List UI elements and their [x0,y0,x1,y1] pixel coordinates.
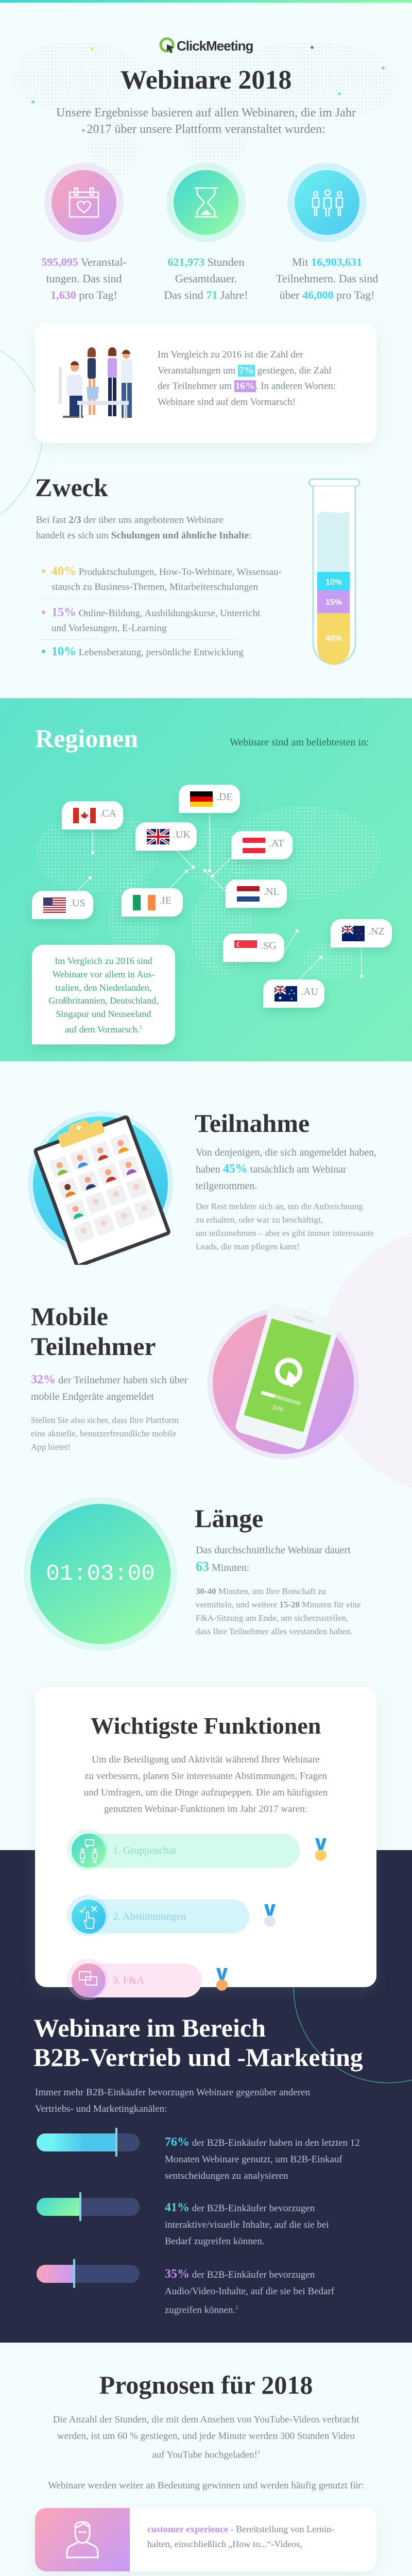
heading: Regionen: Regionen [35,724,138,753]
Prognosen lead: Webinare werden weiter an Bedeutung gewinnen und werden häufig genutzt für: [48,2480,364,2491]
B2B intro: Immer mehr B2B-Einkäufer bevorzugen Webinare gegenüber anderen [35,2087,310,2098]
illustration: clipboard [28,1111,173,1265]
top gradient bar [0,0,412,3]
mobile text: mobile Endgeräte angemeldet [31,1391,154,1402]
test tube chart: 15% [325,598,342,607]
logo: ClickMeeting [177,38,253,54]
navy background B2B [0,1850,412,2343]
stats text: hours: Gesamtdauer. [175,272,237,285]
regions callout: Großbritannien, Deutschland, [48,995,159,1006]
card: customer experience: customer experience - Bereitstellung von Lernin- [147,2524,334,2534]
regions callout: tralien, den Niederlanden, [56,982,151,993]
flag: CA: .CA [99,808,116,819]
B2B intro: Vertriebs- und Marketingkanälen: [35,2104,167,2114]
Teilnahme text: Von denjenigen, die sich angemeldet haben, [196,1147,376,1158]
flag: AT: .AT [269,838,284,849]
card: customer experience [35,2508,376,2571]
Teilnahme note: Der Rest meldete sich an, um die Aufzeichnung [196,1201,363,1211]
regions intro: Webinare sind am beliebtesten in: [230,737,369,748]
test tube chart: 40% [325,634,342,643]
B2B text 76%: sentscheidungen zu analysieren [165,2171,288,2181]
decorative arc [294,1987,412,2083]
Länge note: F&A-Sitzung am Ende, um sicherzustellen, [196,1613,348,1623]
stat circle: events [44,163,124,242]
item 15%: 15% Online-Bildung, Ausbildungskurse, Unterricht [52,606,260,619]
B2B text 35%: Audio/Video-Inhalte, auf die sie bei Bedarf [165,2286,334,2297]
B2B text 41%: interaktive/visuelle Inhalte, auf die sie bei [165,2219,329,2230]
heading: Mobile Teilnehmer: Teilnehmer [31,1332,156,1361]
test tube chart: 10% [325,578,342,587]
heading: Mobile Teilnehmer [31,1302,156,1361]
regions callout: Webinare vor allem in Aus- [53,969,154,979]
growth text: Im Vergleich zu 2016 ist die Zahl der [158,349,303,360]
title: Webinare 2018 [121,65,291,95]
item 15% [42,606,261,634]
mobile text: 32% der Teilnehmer haben sich über [31,1373,187,1386]
illustration: clock: 01:03:00 [46,1561,155,1587]
flag: NZ: .NZ [368,926,385,937]
section: Regionen [0,698,412,1061]
flag: DE [179,785,240,813]
item 40%: 40% Produktschulungen, How-To-Webinare, Wissensau- [52,565,282,578]
growth text [158,349,336,407]
Länge note: dass Ihre Teilnehmer alles verstanden haben. [196,1626,352,1636]
mobile note: App bietet! [31,1442,71,1452]
flag: IE [122,888,183,917]
Teilnahme text [196,1147,376,1192]
Länge note [196,1586,361,1636]
B2B text 76%: Monaten Webinare genutzt, um B2B-Einkauf [165,2154,342,2165]
stats text: events: 1,630 pro Tag! [50,289,117,301]
item 10%: 10% Lebensberatung, persönliche Entwicklung [52,645,244,658]
mobile note: eine aktuelle, benutzerfreundliche mobile [31,1429,176,1438]
item 15%: und Vorlesungen, E-Learning [52,623,167,634]
illustration: team [59,347,132,419]
flag: AT [231,831,293,859]
regions callout: auf dem Vormarsch.1 [65,1024,142,1035]
Zweck intro: handelt es sich um Schulungen und ähnliche Inhalte: [36,530,252,541]
B2B intro [35,2087,310,2114]
heading: Länge: Länge [195,1504,263,1533]
intro: genutzten Webinar-Funktionen im Jahr 2017 waren: [104,1804,307,1815]
stats text: participants: Mit 16,903,631 [292,256,362,268]
intro: Um die Beteiligung und Aktivität während Ihrer Webinare [92,1754,320,1765]
Teilnahme note [196,1201,374,1251]
Länge text [196,1545,351,1574]
flag: NL: .NL [263,886,280,897]
flag: US: .US [70,897,85,909]
item 40%: stausch zu Business-Themen, Mitarbeiterschulungen [52,582,258,592]
regions callout: Singapur und Neuseeland [56,1009,151,1019]
flag: NL [226,879,287,908]
illustration: clock [24,1497,177,1651]
B2B text 35%: zugreifen können.2 [165,2304,238,2315]
stats text: participants: Teilnehmern. Das sind [276,272,378,285]
heading: Zweck: Zweck [35,473,108,502]
panel: Wichtigste Funktionen [35,1687,376,1987]
illustration: phone: 32% [271,1404,284,1413]
flag: UK: .UK [173,829,191,840]
intro: zu verbessern, planen Sie interessante Abstimmungen, Fragen [84,1771,327,1782]
Prognosen intro: Die Anzahl der Stunden, die mit dem Ansehen von YouTube-Videos verbracht [53,2414,359,2425]
flag: IE: .IE [159,895,171,906]
world map dots [37,807,381,979]
B2B text 41%: Bedarf zugreifen können. [165,2236,265,2247]
intro text [56,106,356,136]
mobile note: Stellen Sie also sicher, dass Ihre Plattform [31,1415,179,1425]
flag: AU: .AU [301,986,318,997]
card: customer experience: halten, einschließlich „How to...“-Videos, [147,2539,302,2549]
Zweck list [38,565,282,658]
flag: US [32,891,93,919]
stat circle: hours [166,163,246,242]
B2B bar 35% [37,2259,140,2288]
stats text: hours [164,256,248,301]
regions callout [32,945,175,1044]
stats text: hours: Das sind 71 Jahre! [164,289,248,301]
B2B text 35% [165,2267,335,2315]
growth card [35,323,376,443]
mobile note [31,1415,179,1452]
Länge text: Das durchschnittliche Webinar dauert [196,1545,351,1556]
item 40% [42,565,282,592]
Teilnahme note: Leads, die man pflegen kann! [196,1242,300,1251]
B2B text 35%: 35% der B2B-Einkäufer bevorzugen [165,2267,315,2281]
heading: Teilnahme: Teilnahme [195,1109,310,1138]
Länge note: 30-40 Minuten, um Ihre Botschaft zu [196,1586,326,1596]
stats text: events: tungen. Das sind [46,272,122,285]
flag: NZ [331,919,392,947]
stats text: participants [276,256,378,301]
bar: Abstimmungen [67,1895,276,1936]
intro text: Unsere Ergebnisse basieren auf allen Webinaren, die im Jahr [56,106,356,120]
Teilnahme note: zu erhalten, oder war zu beschäftigt, [196,1215,323,1225]
stats text: participants: über 46,000 pro Tag! [279,289,375,301]
B2B bar 41% [37,2192,140,2221]
flag: UK [135,822,197,851]
heading: B2B: B2B-Vertrieb und -Marketing [33,2043,363,2072]
B2B text 41%: 41% der B2B-Einkäufer bevorzugen [165,2201,315,2214]
intro: und Umfragen, um die Dinge aufzupeppen. Die am häufigsten [84,1787,328,1798]
stat circle: participants [287,163,367,242]
intro [83,1754,328,1815]
stats text: events [41,256,127,301]
B2B text 76% [165,2136,360,2181]
bar: Gruppenchat: 1. Gruppenchat [113,1845,176,1856]
growth text: der Teilnehmer um 16%. In anderen Worten: [158,381,336,392]
Zweck intro: Bei fast 2/3 der über uns angebotenen Webinare [36,515,224,526]
growth text: Webinare sind auf dem Vormarsch! [158,397,296,407]
B2B text 41% [165,2201,329,2247]
test tube chart [308,478,360,665]
decorative arc [0,350,42,515]
flag: SG: .SG [261,940,277,952]
bar: F&A [67,1959,228,2000]
bar: Abstimmungen: 2. Abstimmungen [113,1911,186,1922]
heading: Mobile Teilnehmer: Mobile [31,1302,108,1331]
stats text: hours: 621,973 Stunden [167,256,245,268]
background world map dots [11,43,396,174]
heading: Wichtigste Funktionen [91,1713,321,1739]
Länge text: 63 Minuten: [196,1559,249,1574]
background faint circle [319,1226,412,1494]
Teilnahme note: um teilzunehmen – aber es gibt immer interessante [196,1228,374,1238]
bar: Gruppenchat [67,1829,327,1870]
bar: F&A: 3. F&A [113,1975,144,1986]
heading: B2B: Webinare im Bereich [33,2013,266,2042]
illustration: phone [208,1308,359,1459]
mobile text [31,1373,187,1402]
growth text: Veranstaltungen um 7% gestiegen, die Zahl [158,365,331,376]
B2B text 76%: 76% der B2B-Einkäufer haben in den letzten 12 [165,2136,360,2149]
Teilnahme text: teilgenommen. [196,1180,257,1192]
Teilnahme text: haben 45% tatsächlich am Webinar [196,1162,347,1176]
B2B bar 76% [37,2128,140,2157]
Prognosen intro: auf YouTube hochgeladen!3 [152,2449,260,2460]
flag: DE: .DE [216,791,233,803]
flag: SG [223,934,284,962]
Prognosen intro [53,2414,359,2460]
regions callout: Im Vergleich zu 2016 sind [55,956,152,966]
intro text: 2017 über unsere Plattform veranstaltet wurden: [87,123,325,136]
flag: CA [62,801,123,829]
heading: B2B [33,2013,363,2072]
heading: Prognosen: Prognosen für 2018 [99,2370,313,2399]
Prognosen intro: werden, ist um 60 % gestiegen, und jede Minute werden 300 Stunden Video [57,2431,355,2442]
flag: AU [263,979,324,1008]
stats text: events: 595,095 Veranstal- [41,256,127,268]
Länge note: vermitteln, und weitere 15-20 Minuten für eine [196,1600,361,1609]
Zweck intro [36,515,252,541]
